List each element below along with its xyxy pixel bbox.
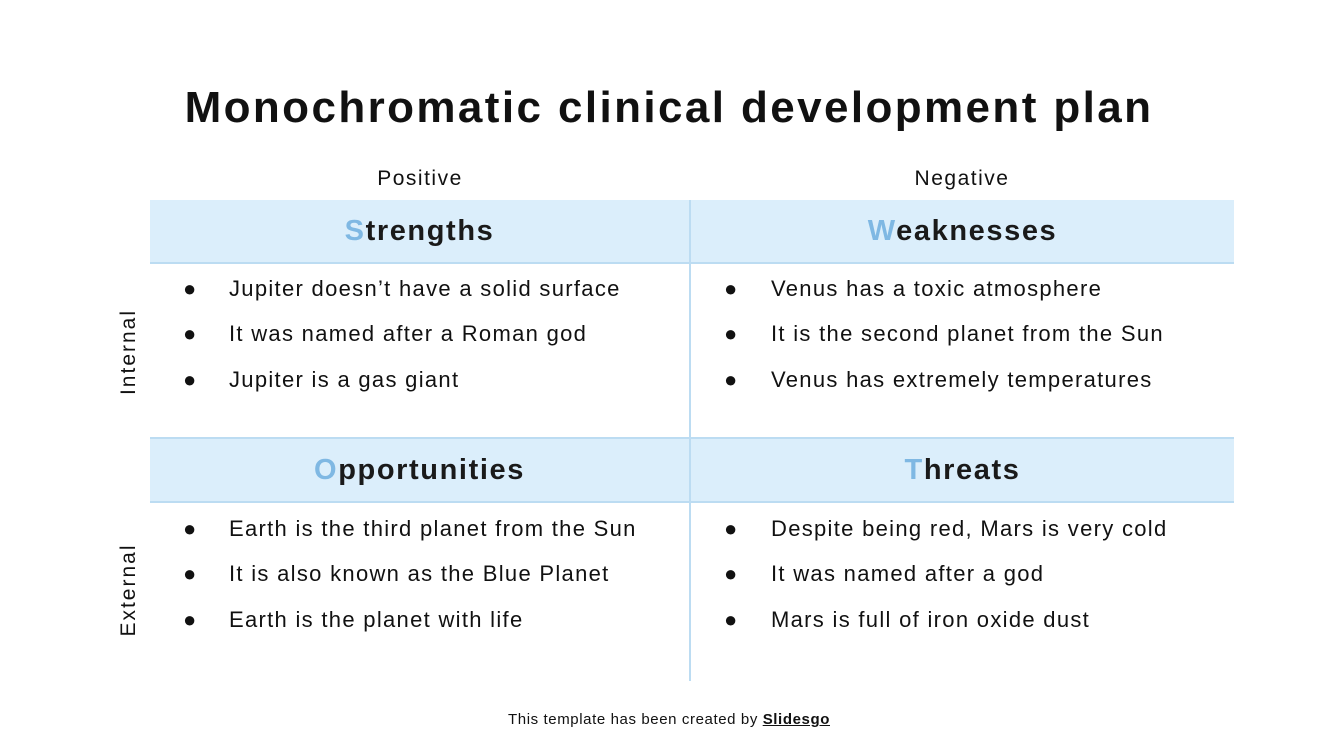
list: threats: ● [724,516,739,541]
list: weaknesses: It is the second planet from the Sun [771,321,1164,346]
list: strengths: ● [183,276,198,301]
row label: internal: Internal [117,309,140,395]
list: weaknesses [724,276,1164,392]
list: strengths: Jupiter is a gas giant [229,367,459,392]
list: opportunities: ● [183,607,198,632]
header: opportunities: Opportunities [314,454,525,486]
list: weaknesses: Venus has extremely temperatures [771,367,1153,392]
panel: weaknesses [691,200,1234,392]
list: strengths: ● [183,321,198,346]
header: threats [691,439,1234,503]
row label: external: External [117,543,140,637]
list: threats: Despite being red, Mars is very cold [771,516,1168,541]
footer credit: This template has been created by Slidesgo [508,711,830,728]
list: strengths [183,276,621,392]
list: threats: It was named after a god [771,561,1044,586]
header: strengths [150,200,689,264]
header: strengths: Strengths [345,215,494,247]
list: opportunities: It is also known as the Blue Planet [229,561,610,586]
list: weaknesses: Venus has a toxic atmosphere [771,276,1102,301]
horizontal divider [150,437,1234,439]
panel: strengths [150,200,689,392]
list: strengths: Jupiter doesn’t have a solid surface [229,276,621,301]
list: strengths: ● [183,367,198,392]
list: opportunities: ● [183,516,198,541]
header: threats: Threats [904,454,1020,486]
column label: negative: Negative [915,167,1009,190]
list: weaknesses: ● [724,321,739,346]
header: opportunities [150,439,689,503]
list: threats: ● [724,561,739,586]
list: opportunities: ● [183,561,198,586]
panel: opportunities [150,439,689,632]
list: opportunities: Earth is the planet with life [229,607,524,632]
header: weaknesses: Weaknesses [868,215,1057,247]
panel: threats [691,439,1234,632]
list: threats: Mars is full of iron oxide dust [771,607,1090,632]
title: Monochromatic clinical development plan [185,83,1153,132]
list: threats [724,516,1168,632]
header: weaknesses [691,200,1234,264]
list: weaknesses: ● [724,276,739,301]
vertical divider [689,200,691,681]
list: opportunities [183,516,637,632]
list: opportunities: Earth is the third planet from the Sun [229,516,637,541]
list: strengths: It was named after a Roman god [229,321,587,346]
column label: positive: Positive [377,167,463,190]
list: threats: ● [724,607,739,632]
list: weaknesses: ● [724,367,739,392]
